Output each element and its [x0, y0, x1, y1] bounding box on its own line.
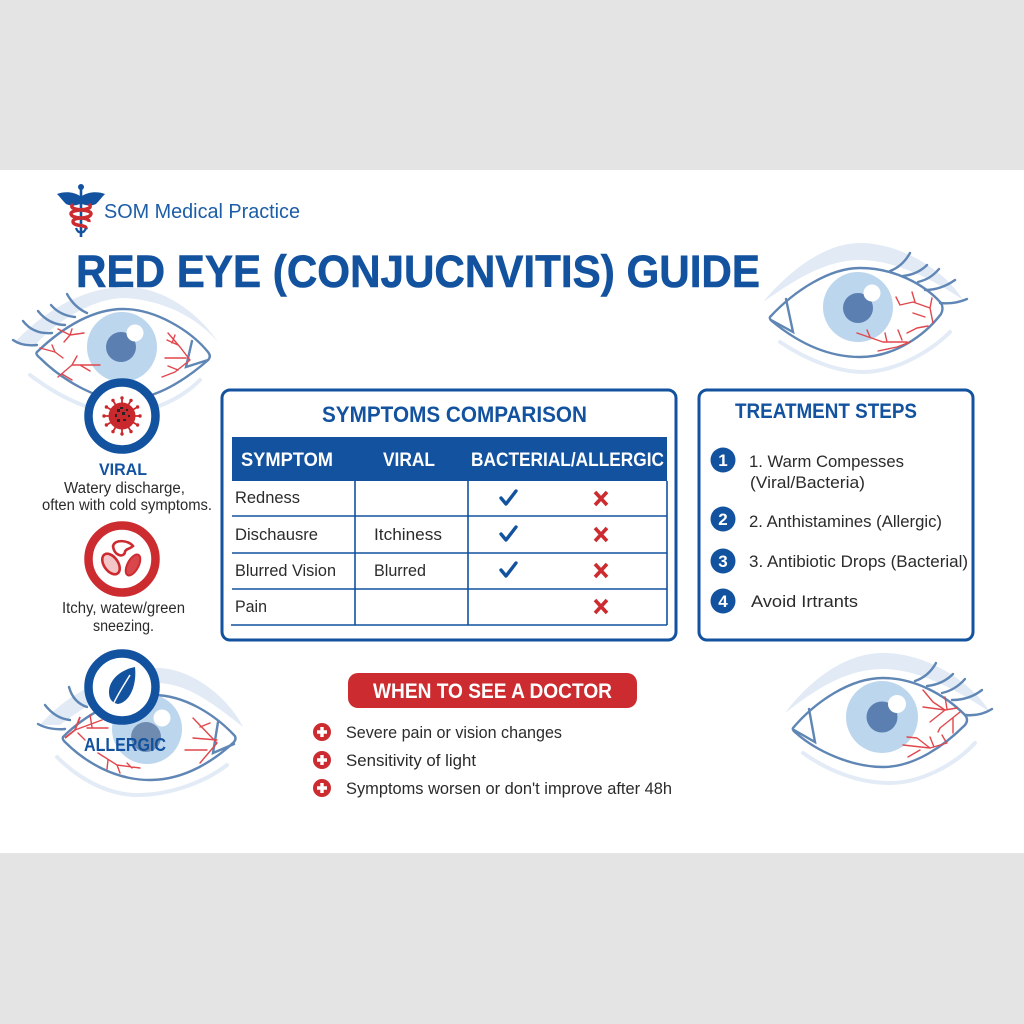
- step 3: 3: [718, 552, 728, 571]
- warning item 2: Sensitivity of light: [346, 751, 476, 770]
- title: RED EYE (CONJUCNVITIS) GUIDE: [76, 246, 760, 297]
- icons: cross marks: [595, 492, 607, 613]
- eye illustration: bottom right: [785, 653, 992, 783]
- label: bacterial description: Itchy, watew/green: [62, 600, 185, 617]
- table header: [232, 437, 667, 481]
- eye illustration: top right: [763, 243, 967, 372]
- step 1: 1. Warm Compesses: [749, 452, 904, 471]
- eye illustration: allergic, bottom left: [38, 668, 243, 795]
- step 3: [710, 548, 968, 574]
- callout: when to see a doctor: [348, 673, 637, 708]
- step 4: Avoid Irtrants: [751, 592, 858, 611]
- step 2: 2: [718, 510, 728, 529]
- label: viral: VIRAL: [99, 460, 147, 479]
- icon: allergic ring with leaf: [88, 654, 156, 720]
- label: allergic: ALLERGIC: [84, 734, 166, 755]
- warning item 1: Severe pain or vision changes: [346, 723, 562, 742]
- step 4: [710, 588, 858, 614]
- logo: caduceus and practice name: [57, 184, 300, 237]
- label: viral: often with cold symptoms.: [42, 497, 212, 514]
- warning list: [313, 723, 672, 798]
- label: bacterial description: sneezing.: [93, 618, 154, 635]
- step 4: 4: [718, 592, 728, 611]
- table row labels: Blurred: [374, 561, 426, 580]
- table row labels: Redness: [235, 488, 300, 507]
- table header: SYMPTOM: [241, 449, 333, 471]
- heading: symptoms comparison: SYMPTOMS COMPARISON: [322, 402, 587, 427]
- table row labels: Dischausre: [235, 525, 318, 544]
- panel: treatment steps: [699, 390, 973, 640]
- step 3: 3. Antibiotic Drops (Bacterial): [749, 552, 968, 571]
- heading: treatment steps: TREATMENT STEPS: [735, 400, 917, 423]
- step 1: [710, 448, 904, 492]
- callout: when to see a doctor: WHEN TO SEE A DOCTOR: [373, 680, 612, 703]
- panel: symptoms comparison: [222, 390, 676, 640]
- icons: check marks: [501, 491, 516, 576]
- label: viral: Watery discharge,: [64, 480, 185, 497]
- step 1: (Viral/Bacteria): [750, 473, 865, 492]
- label: viral: [42, 460, 212, 514]
- table header: VIRAL: [383, 449, 435, 471]
- table row labels: Blurred Vision: [235, 561, 336, 580]
- table header: BACTERIAL/ALLERGIC: [471, 449, 664, 471]
- step 2: [710, 506, 942, 532]
- warning item 3: Symptoms worsen or don't improve after 48h: [346, 779, 672, 798]
- eye illustration: viral, top left: [13, 287, 218, 413]
- icon: viral ring with virus: [88, 382, 156, 450]
- step 1: 1: [718, 451, 728, 470]
- logo: caduceus and practice name: SOM Medical Practice: [104, 201, 300, 223]
- table row labels: Itchiness: [374, 525, 442, 544]
- label: bacterial description: [62, 600, 185, 635]
- step 2: 2. Anthistamines (Allergic): [749, 512, 942, 531]
- table row labels: [235, 488, 442, 616]
- table row labels: Pain: [235, 597, 267, 616]
- icon: bacterial ring with bacteria: [88, 526, 156, 592]
